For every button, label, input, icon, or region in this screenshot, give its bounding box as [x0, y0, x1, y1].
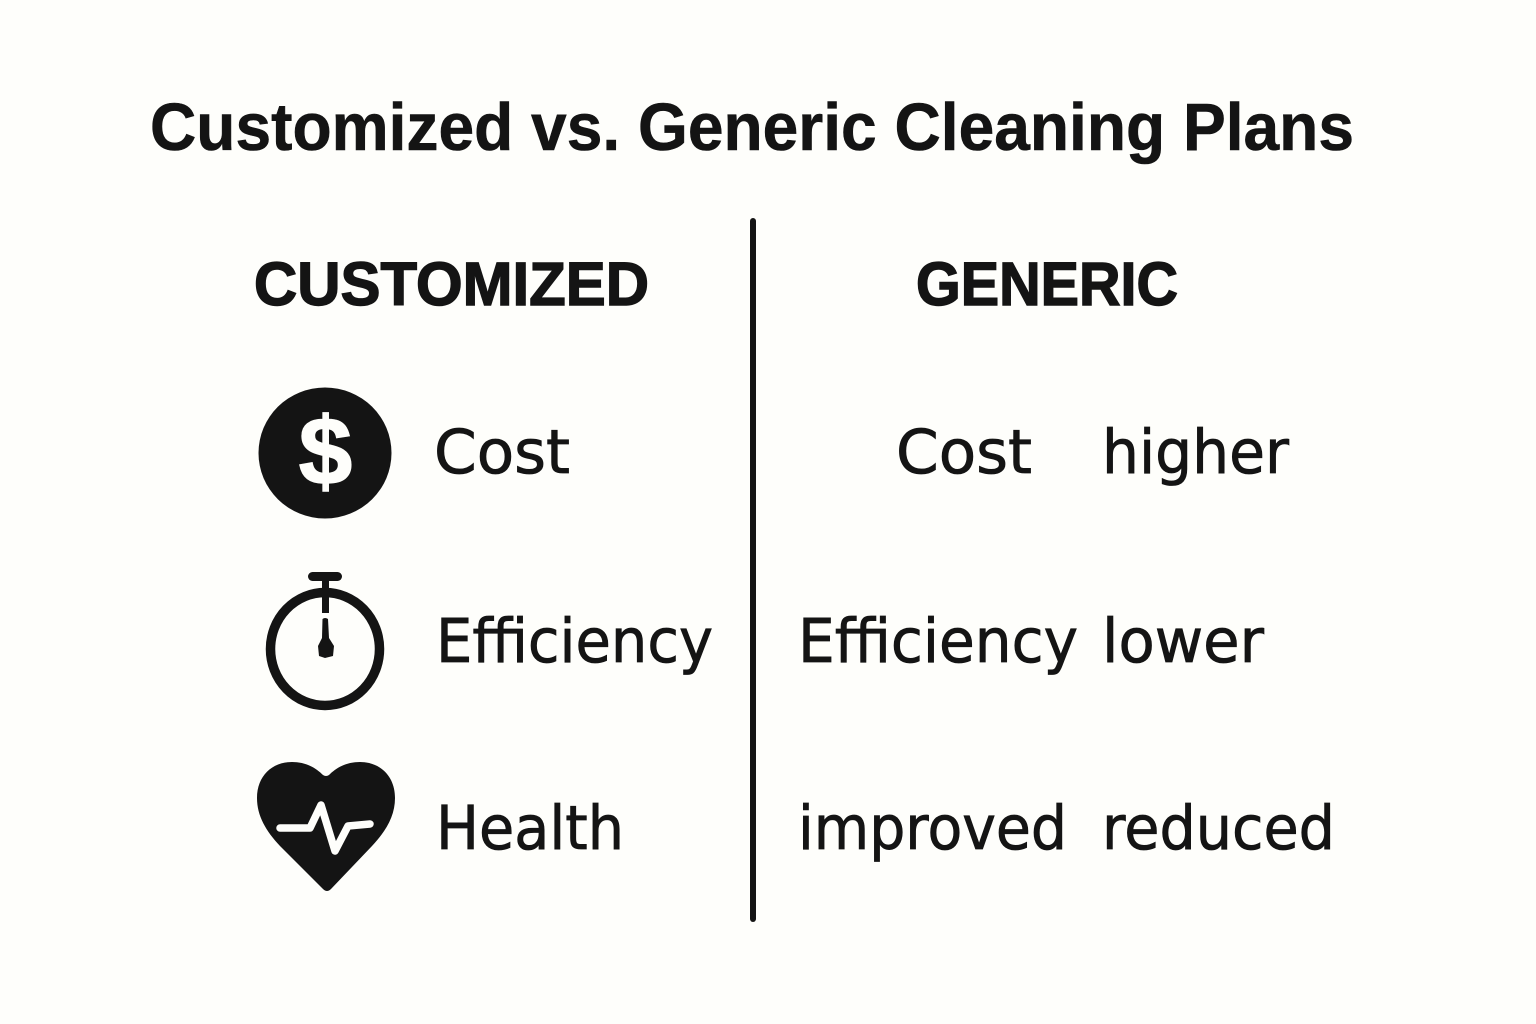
generic: cost value: higher	[1102, 417, 1290, 488]
generic: cost: Cost	[896, 417, 1032, 488]
center divider	[750, 218, 756, 922]
generic: efficiency: Efficiency	[798, 606, 1078, 677]
label: health: Health	[436, 793, 624, 864]
icon: dollar coin	[258, 388, 392, 518]
label: cost: Cost	[434, 417, 570, 488]
icon: heart with pulse	[257, 762, 395, 891]
heading: customized: CUSTOMIZED	[254, 250, 649, 318]
label: efficiency: Efficiency	[436, 606, 713, 677]
generic: health value: reduced	[1102, 793, 1335, 864]
generic: efficiency value: lower	[1102, 606, 1265, 677]
generic: health customized value: improved	[798, 793, 1067, 864]
heading: generic: GENERIC	[916, 250, 1178, 318]
icon: stopwatch	[270, 572, 380, 706]
icon: dollar coin: $	[299, 398, 352, 505]
title: Customized vs. Generic Cleaning Plans	[150, 90, 1354, 165]
